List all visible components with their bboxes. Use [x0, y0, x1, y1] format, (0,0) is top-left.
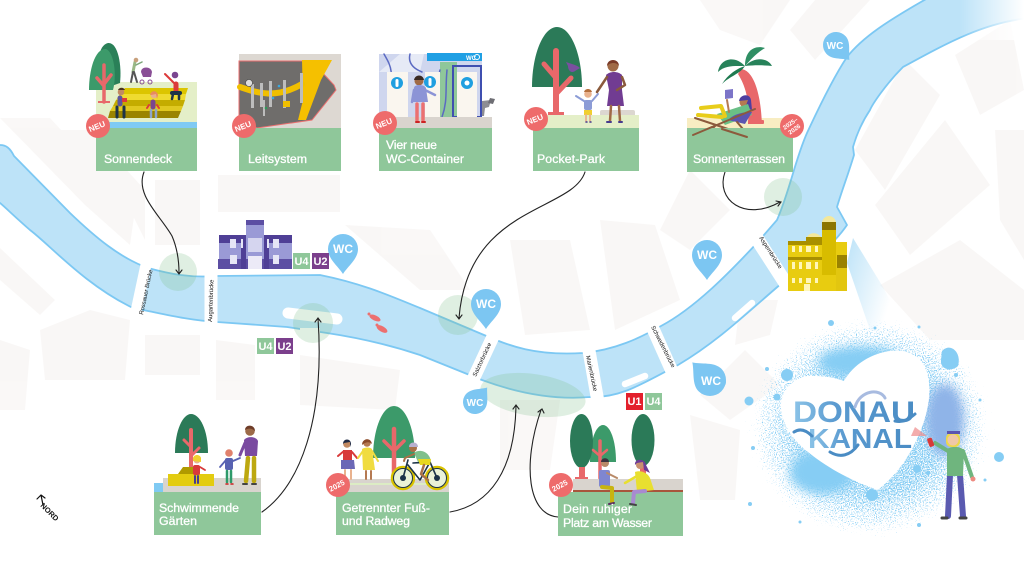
badge: 2025-2026 — [780, 114, 804, 138]
girl in red — [338, 440, 357, 479]
transit badges: U4 U2 north — [293, 253, 329, 269]
deck chair — [693, 109, 755, 136]
badge: NEU: NEU — [526, 112, 545, 127]
bridge labels — [139, 236, 783, 393]
badge: NEU — [524, 107, 548, 131]
panel: Getrennter Fuß- und Radweg: und Radweg — [342, 514, 410, 528]
panel: Leitsystem: Leitsystem — [248, 152, 307, 166]
panel: Sonnendeck: Sonnendeck — [104, 152, 173, 166]
icon: ducks on river — [368, 312, 389, 334]
WC pin: Augartenbrücke — [328, 234, 358, 274]
transit badges: U4 U2 south: U4 — [258, 341, 273, 353]
panel: Vier neue WC-Container: WC — [466, 56, 477, 62]
spray cone — [911, 427, 927, 436]
WC pin: Salztorbrücke: WC — [476, 297, 496, 311]
panel: Sonnenterrassen — [687, 47, 804, 172]
north arrow: NORD — [39, 501, 61, 523]
panel: Dein ruhiger Platz am Wasser — [549, 414, 683, 536]
icon: palm — [718, 47, 772, 124]
logo swashes — [794, 392, 915, 455]
transit badges: U4 U2 north: U2 — [313, 256, 328, 268]
icon: tree — [373, 406, 415, 482]
logo wordmark: DONAU — [793, 396, 915, 429]
callout arrows — [142, 172, 781, 517]
transit badges: U4 U2 south — [257, 338, 293, 354]
WC pin: south of Salztorbrücke: WC — [467, 398, 483, 409]
WC pin: top right: WC — [827, 41, 843, 52]
badge: 2025: 2025 — [327, 478, 346, 494]
WC pin: Augartenbrücke: WC — [333, 242, 353, 256]
spray cloud — [714, 305, 1005, 550]
transit badges: U1 U4 — [626, 393, 662, 410]
icon: tree — [175, 414, 208, 472]
logo wordmark — [793, 396, 915, 454]
reclining reader — [698, 89, 752, 125]
white heart — [781, 351, 929, 490]
landmark: purple station building — [218, 220, 292, 269]
panel: Dein ruhiger Platz am Wasser: Dein ruhiger — [563, 502, 632, 516]
child in red — [193, 455, 205, 483]
icon: dog — [482, 98, 495, 116]
badge: 2025-2026: 2026 — [788, 123, 803, 136]
cyclist on bicycle — [392, 442, 448, 489]
WC pin: south of Salztorbrücke — [458, 380, 496, 419]
transit badges: U1 U4: U4 — [646, 396, 661, 408]
bridges — [135, 228, 790, 402]
figure at door — [412, 76, 435, 122]
badge: NEU: NEU — [375, 116, 394, 131]
badge: NEU: NEU — [88, 119, 107, 134]
WC pin: Salztorbrücke — [471, 289, 501, 329]
icon: trees — [570, 414, 654, 479]
panel: Vier neue WC-Container: WC-Container — [386, 152, 464, 166]
man sitting — [599, 458, 617, 504]
icon: tree — [89, 43, 120, 103]
panel: Sonnenterrassen: Sonnenterrassen — [693, 152, 785, 166]
badge: NEU: NEU — [234, 119, 253, 134]
panel: Sonnendeck — [86, 43, 197, 171]
badge: 2025: 2025 — [550, 478, 569, 494]
WC pin: Schwedenbrücke north — [692, 240, 722, 280]
badge: 2025-2026: 2025– — [782, 117, 800, 132]
transit badges: U4 U2 north: U4 — [294, 256, 309, 268]
panel: Getrennter Fuß- und Radweg: Getrennter Fuß- — [342, 501, 430, 515]
bridge labels: Salztorbrücke — [472, 341, 494, 378]
woman — [597, 60, 625, 122]
river Donaukanal — [0, 0, 1024, 398]
panel: Pocket-Park: Pocket-Park — [537, 152, 606, 166]
panel: Schwimmende Gärten: Gärten — [159, 514, 197, 528]
bridge labels: Augartenbrücke — [208, 279, 216, 322]
transit badges: U1 U4: U1 — [627, 396, 642, 408]
icon: bird — [566, 62, 580, 72]
icon: tree — [532, 27, 582, 113]
adult — [240, 426, 258, 484]
panel: Vier neue WC-Container — [373, 53, 495, 171]
panel: Schwimmende Gärten: Schwimmende — [159, 501, 239, 515]
WC pin: top right — [818, 27, 859, 69]
floating garden blocks — [168, 467, 214, 486]
panel: Getrennter Fuß- und Radweg — [326, 406, 449, 535]
highlight zones — [159, 178, 802, 423]
people on deck — [117, 58, 180, 117]
landmark: yellow building — [788, 216, 847, 291]
WC pin: Schwedenbrücke south — [681, 351, 733, 403]
WC pin: Schwedenbrücke south: WC — [701, 374, 721, 388]
WC pin: Schwedenbrücke north: WC — [697, 248, 717, 262]
child in blue — [220, 449, 240, 484]
transit badges: U4 U2 south: U2 — [277, 341, 292, 353]
bridge labels: Schwedenbrücke — [649, 325, 676, 370]
child — [576, 89, 598, 122]
panel: Leitsystem — [232, 54, 341, 171]
girl in yellow — [358, 439, 378, 479]
logo: Donaukanal spray heart — [714, 305, 1005, 550]
panel: Vier neue WC-Container: Vier neue — [386, 138, 437, 152]
woman sitting — [625, 460, 654, 505]
bridge labels: Marienbrücke — [584, 355, 598, 393]
logo wordmark: KANAL — [808, 423, 912, 454]
person spraying — [927, 431, 976, 518]
bridge labels: Rossauer Brücke — [139, 269, 155, 315]
panel: Schwimmende Gärten — [154, 414, 261, 535]
bridge labels: Aspernbrücke — [757, 236, 783, 271]
panel: Pocket-Park — [524, 27, 639, 171]
stepped seating — [108, 88, 188, 118]
panel: Dein ruhiger Platz am Wasser: Platz am Wasser — [563, 516, 652, 530]
